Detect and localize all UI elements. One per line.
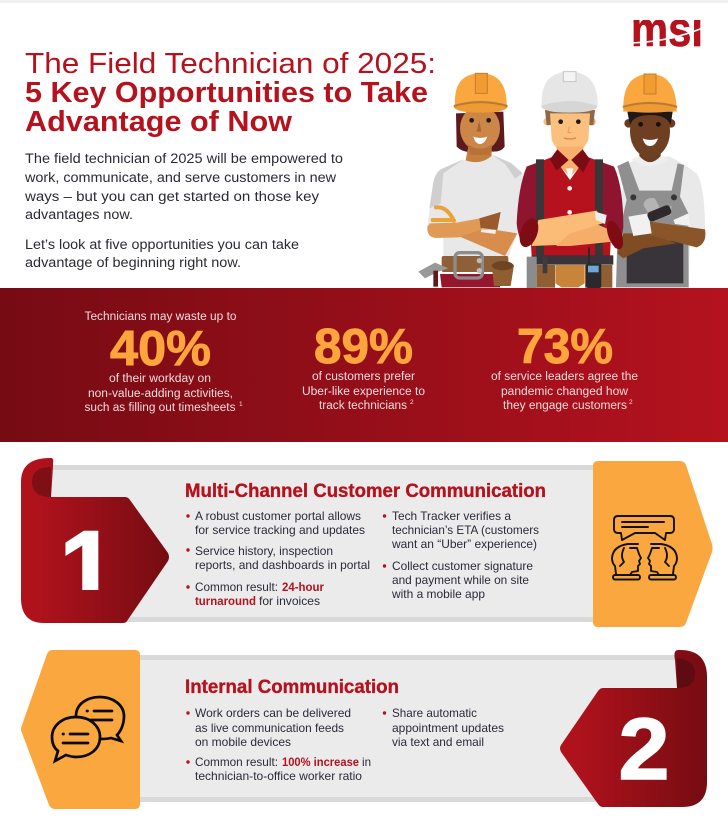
bullets: left column: 100% increase — [282, 755, 359, 769]
title — [25, 48, 436, 138]
stat: 73%: of service leaders agree the — [491, 371, 638, 383]
stat: 40%: Technicians may waste up to — [84, 311, 236, 323]
icon: two people talking — [612, 516, 677, 580]
bullets: right column: with a mobile app — [391, 587, 485, 601]
bullets: left column: turnaround — [195, 594, 256, 608]
bullets: right column: via text and email — [392, 735, 484, 749]
icon tab: chat bubbles — [21, 650, 140, 809]
intro text: advantage of beginning right now. — [25, 255, 241, 270]
intro text — [24, 151, 343, 270]
bullets: left column: as live communication feeds — [195, 721, 344, 735]
bullets: right column: and payment while on site — [392, 573, 529, 587]
bullets: right column: technician’s ETA (customers — [392, 523, 539, 537]
bullets: right column: Collect customer signature — [392, 559, 533, 573]
intro text: The field technician of 2025 will be empowered to — [25, 151, 343, 166]
stat: 40% — [84, 311, 243, 414]
number badge 1 — [21, 458, 169, 624]
stat: 73%: they engage customers — [503, 400, 627, 412]
intro text: work, communicate, and serve customers in new — [24, 170, 336, 185]
belt and tools — [418, 253, 514, 287]
bullets: left column: Common result: — [195, 755, 278, 769]
panel: internal communication — [21, 650, 707, 809]
icon tab: people talking — [593, 461, 712, 627]
bullets: right column: want an “Uber” experience) — [391, 537, 537, 551]
panel: multi-channel customer communication — [21, 458, 712, 627]
bullets: left column: A robust customer portal allows — [195, 509, 361, 523]
bullets: right column — [383, 509, 539, 601]
bullets: left column: Work orders can be delivered — [195, 706, 351, 720]
bullets: left column — [186, 706, 371, 783]
worker: left technician — [418, 73, 523, 287]
worker: right technician — [616, 74, 705, 287]
stat: 73%: 2 — [629, 399, 633, 406]
bullets: right column: appointment updates — [392, 721, 504, 735]
bullets: left column: for invoices — [259, 594, 320, 608]
stat: 73% — [491, 320, 638, 412]
stat: 89%: track technicians — [319, 400, 407, 412]
bullets: left column: technician-to-office worker ratio — [195, 769, 362, 783]
tool belt — [527, 247, 613, 288]
stat: 40%: 40% — [110, 322, 211, 376]
bullets: left column: on mobile devices — [195, 735, 291, 749]
icon: chat bubbles — [52, 697, 124, 761]
number badge 2 — [560, 650, 707, 807]
stat: 89%: Uber-like experience to — [302, 386, 425, 398]
logo: msi: msi — [631, 3, 703, 57]
number badge 2: 2 — [618, 701, 670, 798]
bullets: left column: Common result: — [195, 580, 278, 594]
stat: 73%: pandemic changed how — [501, 386, 629, 398]
logo: msi — [634, 20, 700, 47]
intro text: advantages now. — [25, 207, 133, 222]
bullets: left column — [186, 509, 370, 608]
bullets: left column: in — [362, 755, 371, 769]
title: Advantage of Now — [25, 106, 292, 138]
stat: 89%: of customers prefer — [312, 371, 415, 383]
bullets: right column — [383, 706, 504, 749]
stat: 73%: 73% — [517, 320, 613, 374]
bullets: left column: Service history, inspection — [195, 544, 333, 558]
number badge 1: 1 — [60, 510, 116, 624]
stat: 40%: 1 — [239, 401, 243, 408]
stat: 40%: of their workday on — [109, 373, 211, 385]
illustration: three technicians — [418, 72, 705, 288]
stat: 89%: 89% — [314, 320, 413, 374]
bullets: left column: for service tracking and updates — [195, 523, 365, 537]
bullets: right column: Share automatic — [392, 706, 477, 720]
heading: Internal Communication — [185, 677, 399, 698]
title: The Field Technician of 2025: — [25, 48, 436, 80]
stat: 40%: such as filling out timesheets — [84, 402, 236, 414]
intro text: ways – but you can get started on those key — [24, 189, 319, 204]
worker: centre technician — [516, 72, 626, 288]
stat: 89% — [302, 320, 425, 412]
stats band — [0, 288, 728, 442]
bullets: right column: Tech Tracker verifies a — [392, 509, 511, 523]
bullets: left column: 24-hour — [282, 580, 324, 594]
stat: 89%: 2 — [410, 399, 414, 406]
intro text: Let’s look at five opportunities you can take — [25, 237, 299, 252]
stat: 40%: non-value-adding activities, — [88, 388, 233, 400]
title: 5 Key Opportunities to Take — [25, 77, 428, 109]
bullets: left column: reports, and dashboards in portal — [195, 558, 370, 572]
heading: Multi-Channel Customer Communication — [185, 481, 546, 502]
